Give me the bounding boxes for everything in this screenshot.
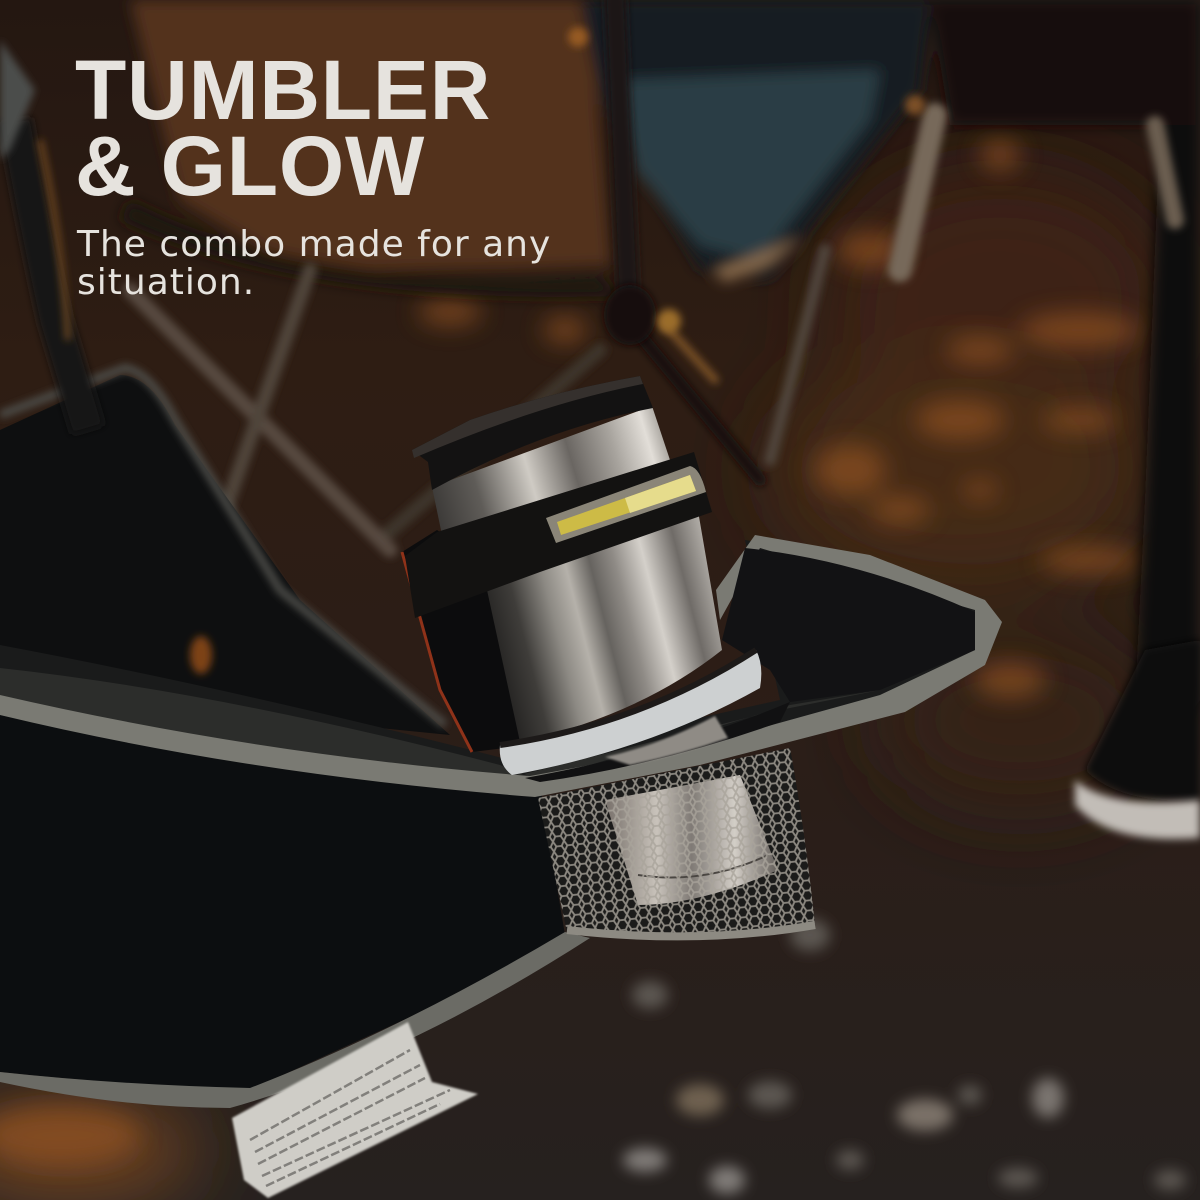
tumbler steel neck xyxy=(432,406,670,535)
tumbler with sleeve and lights xyxy=(402,376,790,782)
elastic strap xyxy=(405,452,712,618)
title: & GLOW xyxy=(75,119,425,213)
pebbles on the ground xyxy=(623,919,1186,1194)
white diffuser base xyxy=(500,650,761,775)
background shoe xyxy=(1075,640,1200,839)
subtitle: The combo made for any xyxy=(77,224,551,265)
foreground chair: left arm and back xyxy=(0,40,450,735)
foreground chair: seat fabric xyxy=(0,535,1002,1108)
paper tag xyxy=(232,1022,478,1198)
tumbler steel body xyxy=(487,505,722,742)
background chair: blurred frame and blue seat xyxy=(120,0,1200,800)
title xyxy=(75,43,491,213)
subtitle xyxy=(76,224,551,303)
title: TUMBLER xyxy=(75,43,491,137)
red-edged black lantern body xyxy=(402,530,530,752)
COB light bar xyxy=(546,466,706,543)
subtitle: situation. xyxy=(77,262,255,303)
tumbler lid xyxy=(412,376,653,490)
cup holder mesh with tumbler bottom xyxy=(538,748,815,937)
dark base plate xyxy=(525,702,790,782)
